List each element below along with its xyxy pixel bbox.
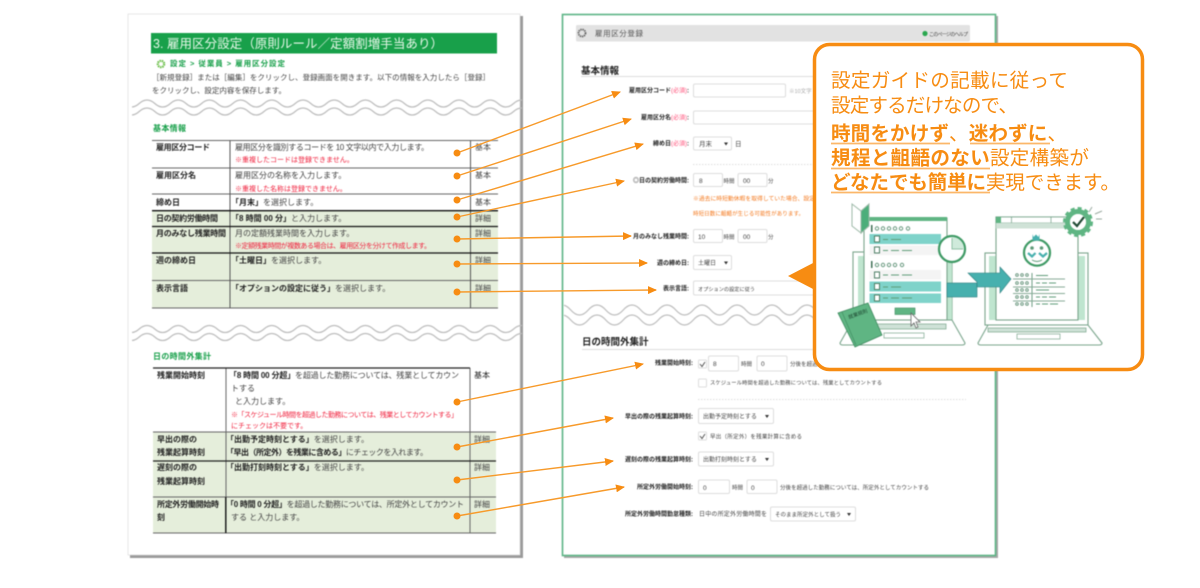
callout text: 規程と齟齬のない設定構築が [831, 148, 1089, 170]
form: daily overtime section: 分後を超過した勤務については、所定外としてカウントする [780, 484, 929, 492]
form: daily overtime section: 日の時間外集計 [582, 336, 649, 348]
form: daily overtime section: 0 [761, 361, 765, 368]
table: daily overtime: 「8 時間 00 分超」を超過した勤務については、残業としてカウン [229, 370, 459, 380]
table: daily overtime: 詳細 [474, 434, 490, 444]
table: basic info: 日の契約労働時間 [156, 213, 218, 223]
intro text [152, 72, 490, 95]
table: daily overtime: 「出勤予定時刻とする」を選択します。 [226, 434, 369, 444]
form: basic info section: 日 [735, 140, 742, 148]
table: daily overtime: トする [231, 384, 255, 393]
form: basic info section: オプションの設定に従う [698, 285, 755, 293]
table: daily overtime: ※「スケジュール時間を超過した勤務については、残業としてカウントする」 [231, 410, 458, 419]
form: basic info section: 分 [768, 233, 774, 241]
table: basic info: 表示言語 [156, 283, 188, 293]
table: daily overtime: 「出勤打刻時刻とする」を選択します。 [226, 462, 369, 472]
callout text: 時間をかけず、迷わずに、 [831, 123, 1067, 145]
icon: beginner mark [852, 204, 869, 233]
callout text: 設定するだけなので、 [831, 95, 1018, 117]
form: daily overtime section: 日中の所定外労働時間を [699, 510, 767, 518]
form: basic info section: 雇用区分名(必須): [641, 114, 689, 122]
form: basic info section: 週の締め日: [657, 259, 689, 267]
intro text: をクリックし、設定内容を保存します。 [152, 85, 286, 95]
table: basic info: 週の締め日 [156, 255, 196, 265]
form: daily overtime section: 時間 [741, 360, 753, 368]
table: basic info: ※重複した名称は登録できません。 [235, 184, 347, 193]
form: basic info section: 時短日数に齟齬が生じる可能性があります。 [693, 210, 804, 218]
panel: settings screen [553, 14, 998, 558]
table: daily overtime: 刻 [157, 512, 165, 522]
table: daily overtime: 「0 時間 0 分超」を超過した勤務については、所定外としてカウント [226, 499, 464, 509]
table: basic info: ※定額残業時間が複数ある場合は、雇用区分を分けて作成します。 [235, 241, 431, 250]
form: basic info section: 締め日(必須): [653, 140, 689, 148]
table: daily overtime: 詳細 [474, 499, 490, 509]
form: daily overtime section: スケジュール時間を超過した勤務については、残業としてカウントする [710, 378, 882, 386]
table: daily overtime: 早出の際の [157, 434, 197, 444]
table: daily overtime: と入力します。 [235, 396, 290, 406]
form: basic info section: 時間 [724, 177, 735, 185]
form: basic info section: 月末 [699, 139, 712, 148]
table: daily overtime: 残業開始時刻 [157, 370, 205, 380]
table: basic info: 基本 [475, 197, 491, 207]
table: daily overtime: 詳細 [474, 462, 490, 472]
form: basic info section: 10 [698, 234, 706, 241]
markers: orange dots [454, 150, 460, 520]
table: basic info: 詳細 [475, 228, 491, 238]
table: daily overtime [153, 368, 496, 533]
form: basic info section: 分 [768, 177, 774, 185]
table: basic info: 締め日 [156, 197, 180, 207]
callout [788, 44, 1142, 370]
table: basic info: 月のみなし残業時間 [156, 228, 226, 238]
table: daily overtime: 「早出（所定外）を残業に含める」にチェックを入れます。 [226, 447, 428, 457]
form: daily overtime section: 早出の際の残業起算時刻: [625, 412, 693, 420]
table: basic info: 基本 [475, 142, 491, 152]
form: basic info section [581, 65, 818, 295]
table: basic info: 雇用区分名 [156, 170, 196, 180]
form: daily overtime section: 出勤打刻時刻とする [703, 456, 757, 464]
table: basic info: ※重複したコードは登録できません。 [235, 155, 354, 164]
breadcrumb: 設定 > 従業員 > 雇用区分設定 [170, 58, 286, 68]
table: daily overtime: 所定外労働開始時 [157, 499, 219, 509]
callout text: どなたでも簡単に実現できます。 [831, 171, 1120, 194]
icon: handbook: 就業規則 [847, 307, 868, 321]
form: basic info section: ※過去に時短勤休暇を取得していた場合、設定 [693, 194, 815, 202]
icon: gear with check [1064, 207, 1102, 236]
arrows: guide rows to form fields [457, 92, 656, 516]
callout text [831, 70, 1120, 194]
form: basic info section: 8 [699, 178, 703, 185]
form: basic info section: 00 [743, 178, 751, 185]
table: basic info: 雇用区分コード [156, 142, 210, 152]
form: daily overtime section [582, 336, 990, 521]
form: basic info section: 00 [743, 234, 751, 241]
title bar [576, 25, 970, 42]
form: basic info section: 時間 [724, 233, 735, 241]
table: basic info: 雇用区分の名称を入力します。 [235, 170, 346, 180]
form: basic info section: ◎日の契約労働時間: [633, 176, 689, 184]
table: basic info: 詳細 [475, 255, 491, 265]
table: daily overtime: する と入力します。 [231, 512, 304, 522]
panel: guide document page [124, 14, 529, 558]
heading: daily overtime: 日の時間外集計 [153, 351, 211, 361]
icon: clock [939, 236, 965, 262]
table: basic info: 雇用区分を識別するコードを 10 文字以内で入力します。 [235, 142, 429, 152]
form: daily overtime section: 出勤予定時刻とする [703, 412, 757, 420]
table: daily overtime: 残業起算時刻 [157, 476, 205, 486]
form: daily overtime section: 8 [713, 361, 717, 368]
form: basic info section: 土曜日 [698, 259, 716, 267]
form: basic info section: 月のみなし残業時間: [633, 232, 689, 240]
table: basic info: 月の定額残業時間を入力します。 [235, 228, 354, 238]
callout text: 設定ガイドの記載に従って [831, 70, 1068, 92]
table: daily overtime: 遅刻の際の [157, 462, 197, 472]
table: daily overtime: にチェックは不要です。 [231, 422, 307, 430]
table: basic info: 詳細 [475, 213, 491, 223]
table: basic info: 「8 時間 00 分」と入力します。 [231, 213, 346, 223]
illustration: laptops with setup guide [838, 204, 1102, 347]
table: basic info: 「土曜日」を選択します。 [231, 255, 326, 265]
heading: basic info: 基本情報 [153, 123, 186, 133]
form: daily overtime section: 時間 [732, 484, 744, 492]
heading: guide title [151, 33, 497, 54]
table: basic info: 「月末」を選択します。 [231, 197, 318, 207]
icon: left laptop [840, 217, 965, 345]
form: daily overtime section: 早出（所定外）を残業計算に含める [710, 432, 802, 440]
table: basic info: 詳細 [475, 283, 491, 293]
icon: right laptop [978, 217, 1102, 345]
form: daily overtime section: 所定外労働時間勤怠種類: [625, 510, 693, 518]
table: daily overtime: 残業起算時刻 [157, 447, 205, 457]
form: daily overtime section: 遅刻の際の残業起算時刻: [625, 456, 693, 464]
form: daily overtime section: 0 [703, 485, 707, 492]
table: basic info: 基本 [475, 170, 491, 180]
form: daily overtime section: 所定外労働開始時刻: [637, 483, 693, 491]
form: basic info section: 雇用区分コード(必須): [629, 86, 689, 94]
title bar: 雇用区分登録 [595, 28, 644, 38]
icon: teal arrow [947, 267, 1011, 297]
icon: handbook [838, 303, 882, 347]
table: basic info: 「オプションの設定に従う」を選択します。 [231, 283, 390, 293]
table: daily overtime: 基本 [474, 370, 490, 380]
form: basic info section: ※10文字 [789, 87, 812, 95]
form: basic info section: 表示言語: [663, 284, 689, 292]
intro text: ［新規登録］または［編集］をクリックし、登録画面を開きます。以下の情報を入力したら［登録］ [152, 72, 490, 82]
form: daily overtime section: 0 [751, 485, 755, 492]
heading: guide title: 3. 雇用区分設定（原則ルール／定額割増手当あり） [153, 37, 443, 51]
form: daily overtime section: そのまま所定外として扱う [775, 510, 841, 518]
form: basic info section: 基本情報 [581, 65, 620, 77]
form: daily overtime section: 分後を超過した [790, 360, 829, 368]
form: daily overtime section: 残業開始時刻: [655, 359, 693, 367]
title bar: このページのヘルプ [929, 32, 968, 38]
table: basic info [152, 140, 498, 308]
